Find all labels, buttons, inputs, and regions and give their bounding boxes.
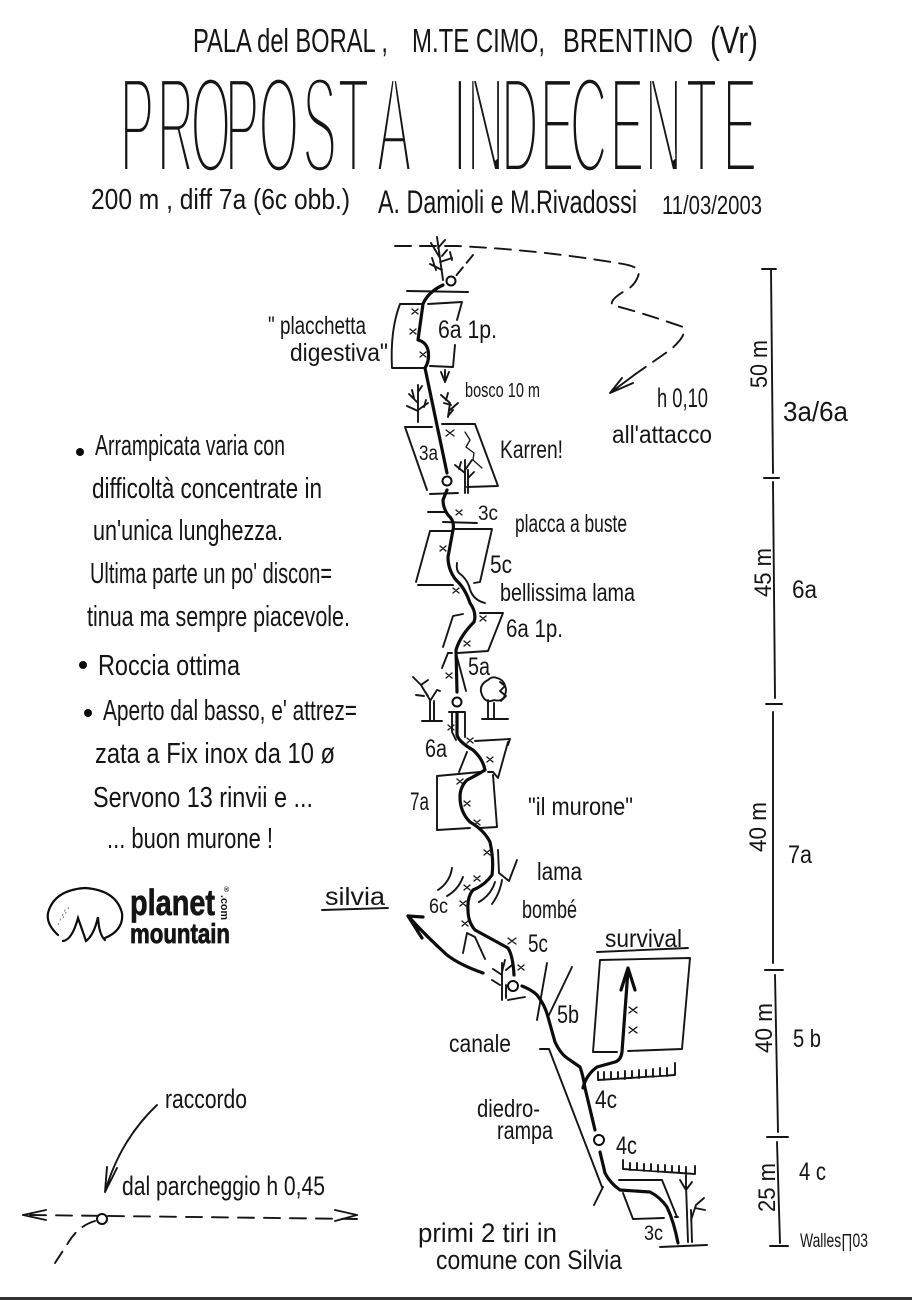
- dashed path to junction: [55, 1221, 95, 1263]
- logo wordmark: ®: [224, 886, 230, 894]
- logo: planetmountain: [48, 882, 230, 949]
- labels: topo annotations: 7a: [410, 788, 429, 816]
- section grades: 5 b: [793, 1025, 821, 1053]
- section lengths: 40 m: [745, 802, 772, 852]
- labels: topo annotations: 3c: [478, 502, 498, 525]
- notes text block: difficoltà concentrate in: [92, 473, 322, 505]
- heading: location: PALA del BORAL ,: [193, 22, 388, 59]
- heading: location: [193, 20, 758, 62]
- labels: topo annotations: 3c: [644, 1222, 663, 1245]
- notes text block: un'unica lunghezza.: [93, 515, 283, 547]
- labels: topo annotations: silvia: [325, 883, 385, 911]
- heading: location: BRENTINO: [563, 22, 693, 59]
- labels: topo annotations: placca a buste: [515, 510, 627, 538]
- labels: topo annotations: canale: [449, 1030, 511, 1058]
- labels: topo annotations: comune con Silvia: [436, 1245, 623, 1275]
- section grades: 4 c: [799, 1158, 826, 1186]
- notes text block: Roccia ottima: [98, 650, 241, 682]
- notes text block: tinua ma sempre piacevole.: [87, 601, 350, 633]
- labels: topo annotations: 4c: [616, 1132, 637, 1160]
- section lengths: 45 m: [750, 548, 777, 597]
- road dashed line: [30, 1215, 357, 1219]
- section lengths: 40 m: [751, 1003, 778, 1053]
- section grades: 6a: [792, 576, 817, 604]
- labels: topo annotations: diedro-: [477, 1095, 540, 1123]
- section grades: [783, 396, 848, 1186]
- notes text block: Ultima parte un po' discon=: [90, 558, 332, 590]
- labels: topo annotations: Karren!: [500, 436, 563, 464]
- labels: topo annotations: " placchetta: [268, 312, 366, 340]
- height and grade scale: [745, 269, 868, 1252]
- icons: trees: [407, 385, 707, 1247]
- main route line: [418, 285, 447, 473]
- scale line: [762, 269, 788, 1246]
- labels: topo annotations: 6a: [425, 735, 447, 763]
- notes text block: Arrampicata varia con: [95, 430, 285, 462]
- labels: topo annotations: [268, 312, 712, 1275]
- logo wordmark: mountain: [130, 918, 230, 949]
- labels: topo annotations: digestiva": [290, 339, 388, 367]
- subtitle: route data: 11/03/2003: [662, 190, 762, 220]
- labels: topo annotations: 4c: [595, 1086, 617, 1114]
- labels: topo annotations: primi 2 tiri in: [418, 1218, 557, 1248]
- main route line: third section: [457, 713, 514, 975]
- route variant: survival with arrow: [583, 968, 635, 1088]
- labels: topo annotations: 5c: [528, 930, 548, 958]
- logo mark: [48, 888, 122, 941]
- labels: topo annotations: "il murone": [528, 793, 633, 821]
- heading: location: (Vr): [710, 20, 758, 62]
- arrow: raccordo: [105, 1105, 157, 1192]
- subtitle: route data: A. Damioli e M.Rivadossi: [378, 184, 637, 220]
- labels: topo annotations: bellissima lama: [500, 579, 635, 607]
- labels: topo annotations: bombé: [522, 896, 577, 924]
- labels: topo annotations: all'attacco: [612, 421, 712, 449]
- silvia underline: [322, 908, 388, 910]
- notes text block: Servono 13 rinvii e ...: [93, 782, 313, 814]
- notes text block: [76, 430, 357, 855]
- notes text block: zata a Fix inox da 10 ø: [95, 738, 335, 770]
- bullets: [76, 448, 92, 717]
- subtitle: route data: [91, 184, 762, 220]
- labels: topo annotations: 5c: [490, 551, 512, 579]
- rock features: [392, 291, 695, 1219]
- section grades: 7a: [788, 841, 812, 869]
- labels: topo annotations: bosco 10 m: [465, 380, 540, 402]
- belay stations: [442, 276, 604, 1145]
- labels: topo annotations: 5a: [468, 653, 490, 681]
- heading: location: M.TE CIMO,: [412, 22, 545, 59]
- signature: Walles∏03: [800, 1231, 868, 1252]
- road arrows: [23, 1210, 357, 1221]
- label: from car park: dal parcheggio h 0,45: [122, 1171, 325, 1201]
- section grades: 3a/6a: [783, 396, 848, 427]
- labels: topo annotations: rampa: [497, 1117, 553, 1145]
- labels: topo annotations: 5b: [557, 1001, 579, 1029]
- subtitle: route data: 200 m , diff 7a (6c obb.): [91, 184, 350, 216]
- section lengths: [745, 340, 781, 1212]
- descent path: dashed with arrow: [395, 246, 684, 393]
- topo diagram: climbing route: [268, 237, 712, 1275]
- junction point: [97, 1214, 107, 1224]
- labels: topo annotations: 6c: [429, 895, 448, 918]
- labels: topo annotations: survival: [605, 925, 682, 953]
- labels: topo annotations: 6a 1p.: [438, 316, 497, 344]
- bolts: [410, 309, 637, 1033]
- main route line: lower section: [522, 986, 678, 1243]
- access sketch: [23, 1084, 357, 1263]
- title: PROPOSTA INDECENTE: [120, 50, 757, 203]
- section lengths: 25 m: [754, 1163, 781, 1212]
- logo wordmark: [130, 882, 230, 949]
- label: raccordo: raccordo: [165, 1084, 247, 1114]
- small arrow: to the woods: [441, 370, 449, 382]
- icon: summit tree: [430, 237, 452, 280]
- route variant: silvia with arrow: [408, 916, 483, 973]
- logo wordmark: .com: [218, 895, 230, 920]
- labels: topo annotations: lama: [537, 858, 582, 886]
- labels: topo annotations: h 0,10: [657, 383, 708, 413]
- bottom edge: [0, 1297, 912, 1300]
- labels: topo annotations: 6a 1p.: [506, 615, 563, 643]
- logo wordmark: planet: [130, 882, 215, 923]
- notes text block: Aperto dal basso, e' attrez=: [103, 695, 357, 727]
- labels: topo annotations: 3a: [419, 442, 438, 465]
- section lengths: 50 m: [746, 340, 773, 388]
- notes text block: ... buon murone !: [107, 823, 273, 855]
- main route line: second section: [443, 490, 475, 692]
